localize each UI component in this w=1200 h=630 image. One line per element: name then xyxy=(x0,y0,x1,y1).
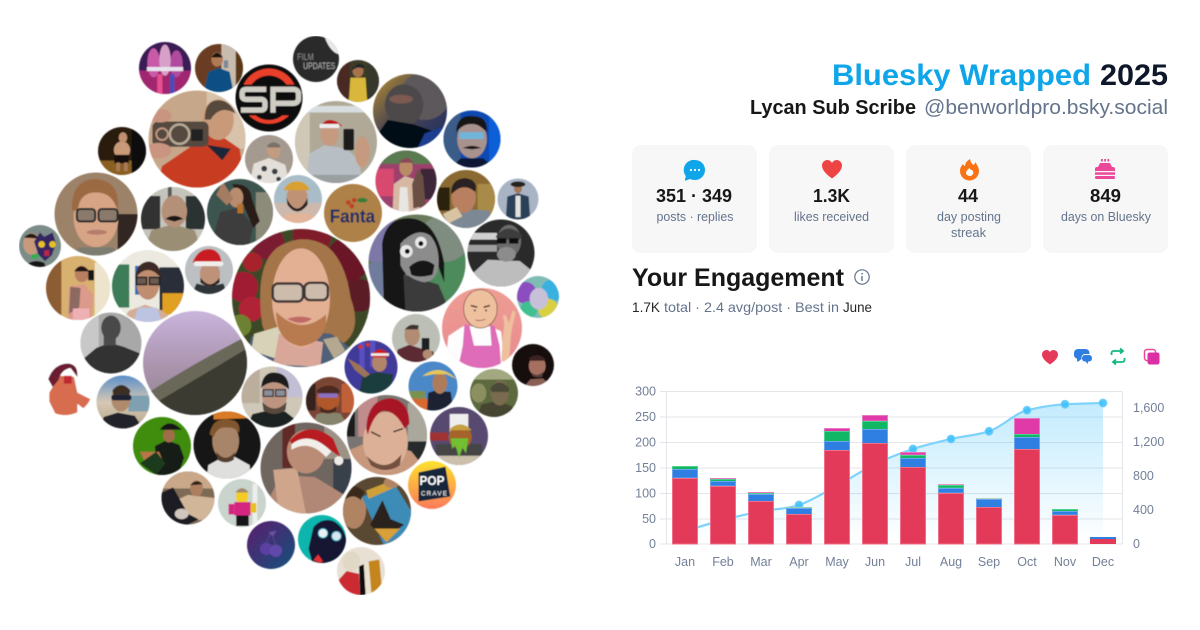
avatar: glasses man on sofa xyxy=(242,366,302,428)
avatar: black and white man with hand xyxy=(468,220,534,286)
avatar: man with sunglasses at beach xyxy=(96,376,150,428)
left axis labels: 100 xyxy=(635,486,656,500)
right axis labels xyxy=(1133,401,1164,551)
avatar: dark colourful portrait xyxy=(373,73,450,148)
avatar: black and white man xyxy=(80,312,142,374)
right axis labels: 400 xyxy=(1133,503,1154,517)
icon: quotes xyxy=(1144,350,1160,364)
avatar: man with long hair xyxy=(207,179,273,245)
month labels: Oct xyxy=(1017,555,1037,569)
avatar: cherry logo xyxy=(247,521,295,569)
month labels: May xyxy=(825,555,850,569)
avatar: film updates sticker: UPDATES xyxy=(303,61,335,71)
avatar: fanta logo: Fanta xyxy=(330,205,376,226)
avatar: fanta logo xyxy=(324,184,382,242)
icon: birthday cake xyxy=(1095,159,1115,179)
avatar: pixel man on green xyxy=(133,417,191,475)
month labels: Feb xyxy=(712,555,734,569)
icon: likes heart xyxy=(1042,350,1058,364)
month labels: Apr xyxy=(789,555,809,569)
panel: day posting streak: streak xyxy=(951,226,987,240)
heading: your engagement: Your Engagement xyxy=(632,264,845,292)
bar: Apr xyxy=(786,508,812,544)
avatar: selfie in mirror xyxy=(46,256,110,320)
avatar: lego figure xyxy=(218,479,266,527)
icon: chat bubble xyxy=(684,160,705,181)
bar: Jun xyxy=(862,416,888,544)
panel: posts and replies: posts · replies xyxy=(656,210,734,224)
avatar: man with red hat xyxy=(347,395,427,475)
left axis labels xyxy=(635,384,656,551)
stacked bars xyxy=(672,416,1116,544)
avatar: man with book xyxy=(342,477,411,545)
left axis labels: 250 xyxy=(635,410,656,424)
bar: Feb xyxy=(710,478,736,544)
avatar: man with santa hat and phone xyxy=(295,101,377,183)
avatar: main portrait xyxy=(231,228,371,368)
avatar: curly hair man xyxy=(194,412,260,478)
month labels xyxy=(675,555,1114,569)
avatar: pink cartoon with overalls xyxy=(442,288,522,368)
left axis labels: 50 xyxy=(642,512,656,526)
cumulative area xyxy=(685,403,1103,544)
avatar: man in yellow cap xyxy=(274,175,322,223)
avatar: santa hat and beard xyxy=(185,246,233,294)
avatar: film updates sticker xyxy=(293,36,339,82)
month labels: Jan xyxy=(675,555,695,569)
avatar: film updates sticker: FILM xyxy=(297,52,314,62)
avatar: pop crave logo: CRAVE xyxy=(421,491,447,498)
bar: Jan xyxy=(672,466,698,544)
left axis labels: 0 xyxy=(649,537,656,551)
avatar: man in brown room xyxy=(437,170,495,228)
avatar: man in pink scene xyxy=(376,150,436,212)
avatar: blonde with flag xyxy=(337,547,385,595)
panel: day posting streak xyxy=(906,145,1031,253)
panel: days on Bluesky: 849 xyxy=(1090,186,1121,206)
avatar: red singing illustration xyxy=(48,362,91,416)
panel: posts and replies: 351 · 349 xyxy=(656,186,732,206)
avatar: man in floral shirt xyxy=(245,135,293,183)
avatar: man in trees xyxy=(470,369,518,417)
avatar: lilac fog landscape xyxy=(143,311,247,415)
panel: likes received xyxy=(769,145,894,253)
avatar: man in orange hoodie xyxy=(145,90,246,188)
avatar: SP logo xyxy=(236,64,302,132)
engagement summary: total · 2.4 avg/post · Best in xyxy=(664,299,839,315)
avatar: man in blue shirt xyxy=(195,44,243,92)
bar: Jul xyxy=(900,452,926,544)
bar: Oct xyxy=(1014,418,1040,544)
avatar: man in dark with suspenders xyxy=(98,127,146,175)
avatar: majora mask xyxy=(19,225,61,267)
left axis labels: 150 xyxy=(635,461,656,475)
avatar: shirtless man with santa hat xyxy=(260,422,352,514)
chart grid xyxy=(660,392,1122,544)
user name and handle: @benworldpro.bsky.social xyxy=(924,97,1168,119)
avatar: pop crave logo xyxy=(408,461,456,509)
panel: day posting streak: day posting xyxy=(937,210,1001,224)
icon: replies chat xyxy=(1074,349,1092,364)
avatar bubble cluster xyxy=(19,36,563,595)
right axis labels: 1,200 xyxy=(1133,435,1164,449)
avatar: man with hat and denim jacket xyxy=(498,178,538,220)
icon: flame xyxy=(960,159,979,180)
panel: days on Bluesky xyxy=(1043,145,1168,253)
month labels: Mar xyxy=(750,555,772,569)
user name and handle xyxy=(750,97,1168,119)
title: Bluesky Wrapped xyxy=(832,59,1091,92)
avatar: beige sweater man xyxy=(162,472,214,524)
month labels: Nov xyxy=(1054,555,1077,569)
avatar: iridescent face xyxy=(514,276,563,319)
panel: day posting streak: 44 xyxy=(958,186,978,206)
bar: Dec xyxy=(1090,537,1116,544)
bar: May xyxy=(824,428,850,544)
icon: heart xyxy=(822,160,842,178)
right axis labels: 1,600 xyxy=(1133,401,1164,415)
cumulative markers xyxy=(795,399,1107,509)
left axis labels: 200 xyxy=(635,436,656,450)
cumulative line xyxy=(685,403,1103,531)
chart: monthly engagement xyxy=(635,384,1164,569)
avatar: glasses man portrait xyxy=(54,172,138,256)
bar: Mar xyxy=(748,492,774,544)
avatar: man with blue light and moustache xyxy=(444,110,500,168)
month labels: Jun xyxy=(865,555,885,569)
panel: posts and replies xyxy=(632,145,757,253)
icon: info xyxy=(855,270,869,284)
avatar: man in yellow tank xyxy=(337,60,379,102)
bar: Aug xyxy=(938,484,964,544)
right axis labels: 0 xyxy=(1133,537,1140,551)
avatar: bald man with moustache on train xyxy=(141,187,205,251)
engagement summary: 1.7K xyxy=(632,299,661,315)
month labels: Aug xyxy=(940,555,962,569)
bar: Sep xyxy=(976,498,1002,544)
avatar: orange man with glasses xyxy=(306,377,354,425)
bar: Nov xyxy=(1052,510,1078,544)
panel: likes received: 1.3K xyxy=(813,186,850,206)
avatar: slay poster xyxy=(139,42,191,94)
avatar: juggler on purple stage xyxy=(344,340,398,394)
legend icons xyxy=(1042,348,1160,364)
avatar: vader with sunglasses xyxy=(298,515,346,563)
user name and handle: Lycan Sub Scribe xyxy=(750,97,916,119)
panel: likes received: likes received xyxy=(794,210,869,224)
month labels: Sep xyxy=(978,555,1000,569)
avatar: pop crave logo: POP xyxy=(420,474,444,488)
right axis labels: 800 xyxy=(1133,469,1154,483)
left axis labels: 300 xyxy=(635,384,656,398)
avatar: man with sun hat xyxy=(408,362,458,410)
avatar: basketball green slime xyxy=(430,407,488,465)
month labels: Dec xyxy=(1092,555,1114,569)
engagement summary: June xyxy=(843,299,872,315)
avatar: creepy long-haired figure xyxy=(368,214,466,312)
avatar: selfie man in plaid xyxy=(392,314,440,362)
avatar: man in glasses and tank with posters xyxy=(112,250,184,322)
panel: days on Bluesky: days on Bluesky xyxy=(1061,210,1152,224)
title: 2025 xyxy=(1100,59,1168,92)
avatar: dark portrait close-up xyxy=(512,344,554,386)
month labels: Jul xyxy=(905,555,921,569)
icon: reposts xyxy=(1112,348,1124,364)
